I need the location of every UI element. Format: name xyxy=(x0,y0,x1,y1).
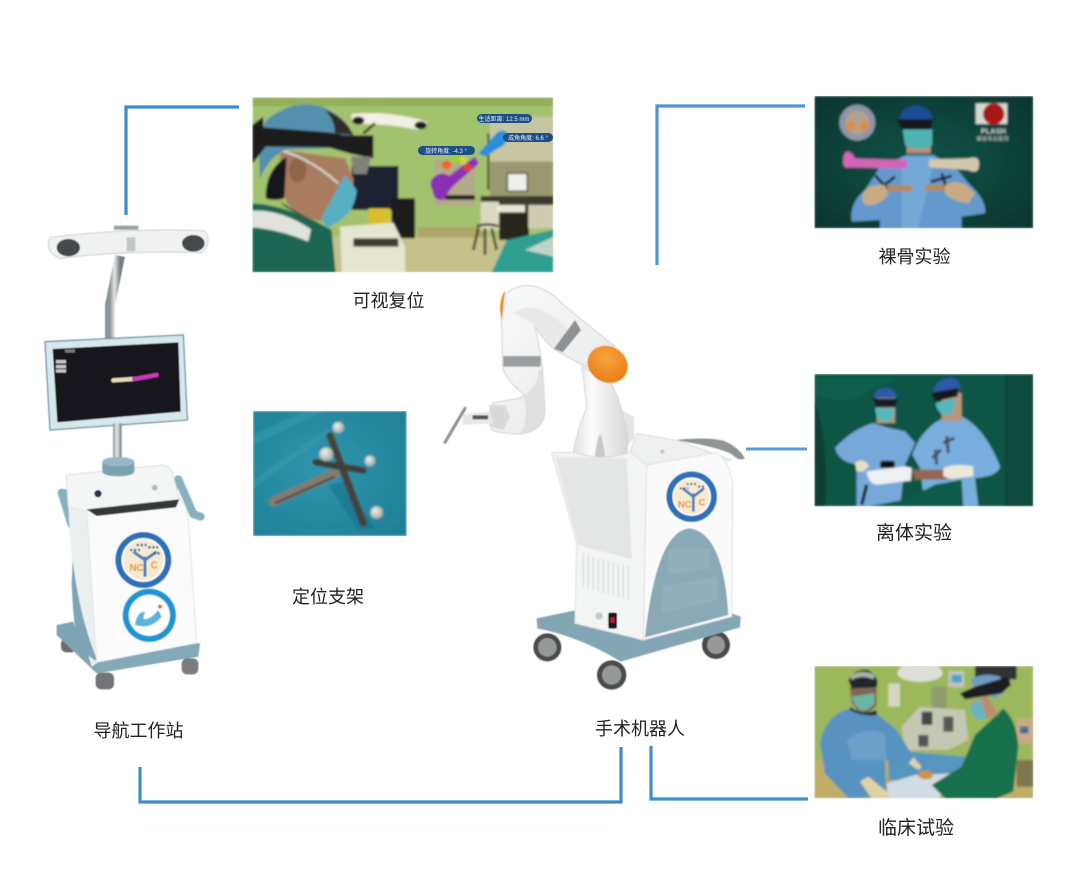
connector: robot to cadaver bone experiment xyxy=(657,106,805,265)
photo: cadaver bone experiment: PLASH xyxy=(981,126,1006,135)
photo label pills: AR readouts xyxy=(418,114,553,155)
logo: NCTC: NC xyxy=(129,563,144,574)
access panel arch xyxy=(645,528,728,637)
pole base xyxy=(102,457,134,476)
label: cadaver bone experiment: 裸骨实验 xyxy=(878,247,950,267)
logo: NCTC: C xyxy=(151,560,158,571)
connector: robot to clinical trial xyxy=(651,746,808,799)
logo: NCTC: NC xyxy=(678,499,692,509)
label: clinical trial: 临床试验 xyxy=(878,817,954,839)
label: surgical robot: 手术机器人 xyxy=(595,719,685,739)
connector: robot to specimen experiment xyxy=(746,448,807,450)
surgical robot xyxy=(445,285,745,690)
logo: NCTC xyxy=(115,532,171,588)
cart body xyxy=(552,433,733,640)
photo: positioning bracket xyxy=(253,411,407,536)
cart base xyxy=(537,611,741,662)
label: visual reduction: 可视复位 xyxy=(352,291,424,311)
label: positioning bracket: 定位支架 xyxy=(292,587,364,607)
logo: blue circular badge xyxy=(123,589,176,642)
handles xyxy=(62,493,87,532)
photo: specimen experiment xyxy=(814,374,1033,506)
robot wheels rear xyxy=(702,631,730,659)
photo: cadaver bone experiment xyxy=(814,96,1033,228)
logo: NCTC xyxy=(666,471,717,522)
photo: visual reduction with AR headset xyxy=(252,97,553,272)
label: navigation workstation: 导航工作站 xyxy=(94,721,184,741)
handle xyxy=(675,438,745,459)
cabinet body xyxy=(66,465,198,673)
logo: NCTC: C xyxy=(699,497,706,507)
switch panel xyxy=(595,612,617,629)
far wheel and base xyxy=(57,622,200,689)
photo: clinical trial xyxy=(814,663,1033,798)
monitor pole xyxy=(113,423,122,460)
label: specimen experiment: 离体实验 xyxy=(876,522,952,544)
front wheels xyxy=(533,633,626,690)
robot arm xyxy=(487,285,634,434)
tracking camera xyxy=(48,226,208,258)
robot column xyxy=(573,367,634,457)
surgical tool xyxy=(445,408,493,442)
monitor xyxy=(45,335,187,430)
support arm xyxy=(110,256,120,338)
photo: cadaver bone experiment: 解放军总医院 xyxy=(977,135,1009,143)
photo label pills: AR readouts: 旋转角度: -4.3 ° xyxy=(425,147,467,155)
photo label pills: AR readouts: 生适距离: 12.5 mm xyxy=(479,115,529,123)
navigation workstation xyxy=(45,226,208,689)
photo label pills: AR readouts: 成角角度: 6.6 ° xyxy=(508,134,548,142)
connector: workstation to robot xyxy=(140,747,621,802)
connector: navigation workstation to visual reduction xyxy=(126,107,239,215)
